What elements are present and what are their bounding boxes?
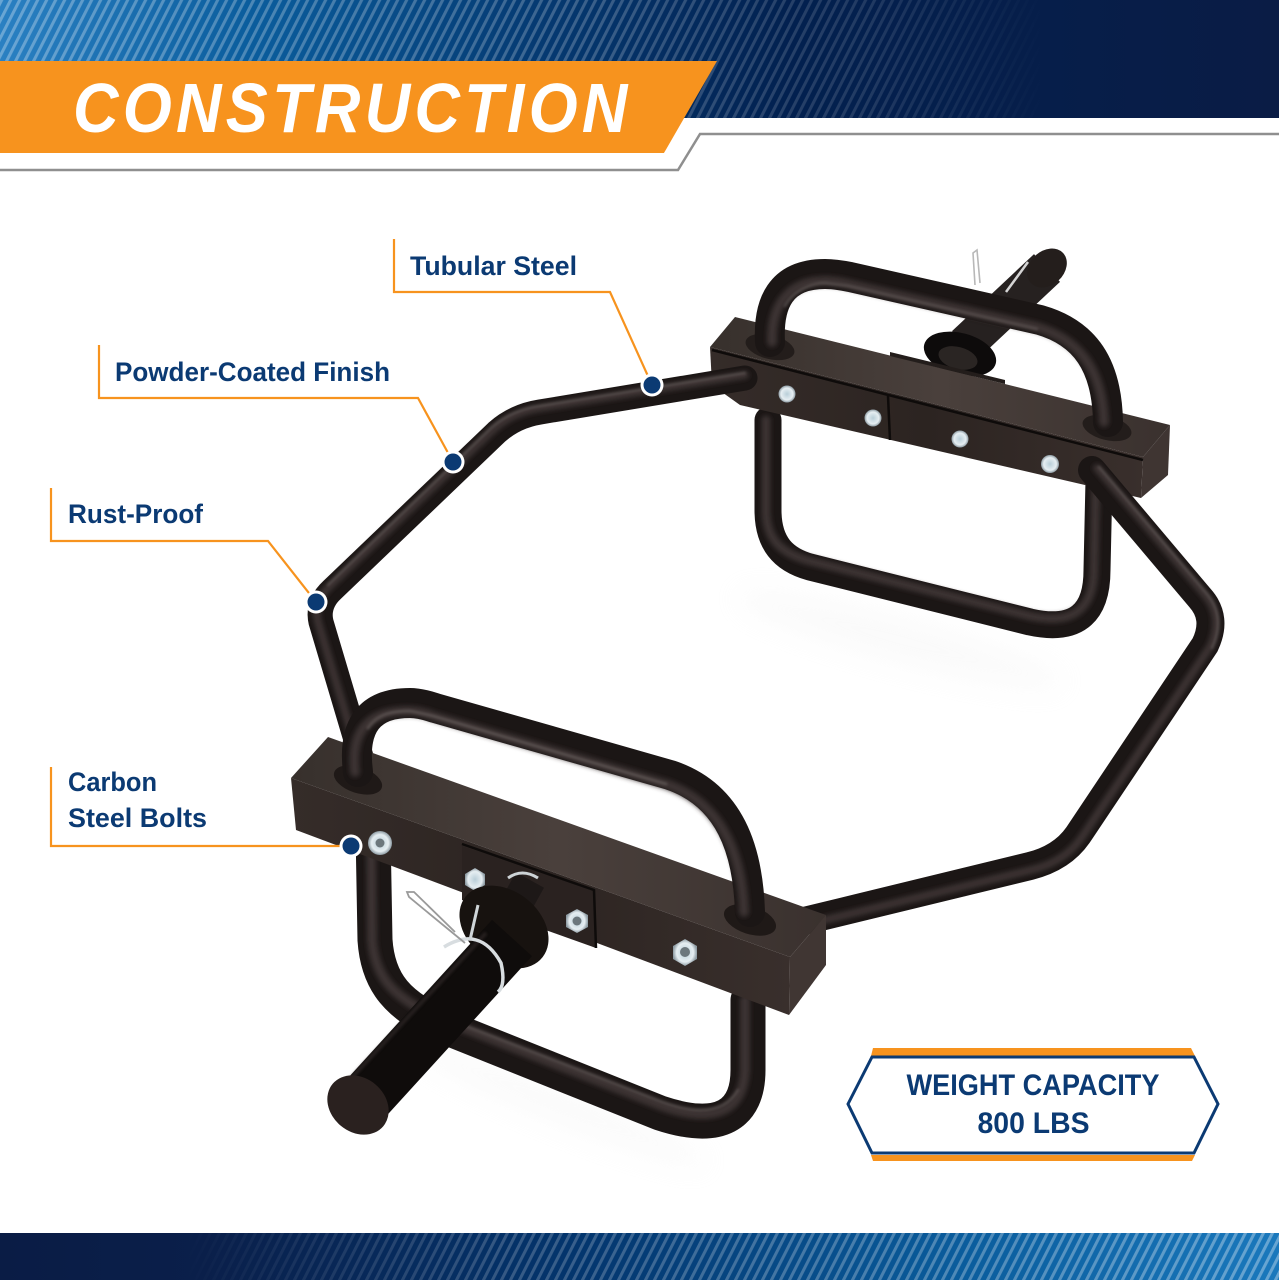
title ribbon (0, 61, 717, 153)
callout: Carbon Steel Bolts (51, 767, 362, 858)
weight capacity badge: WEIGHT CAPACITY (906, 1069, 1160, 1102)
front loading sleeve (315, 868, 565, 1147)
callout: Powder-Coated Finish (99, 345, 464, 474)
back sleeve bar (710, 317, 1170, 498)
callout: Carbon Steel Bolts: Carbon (68, 767, 157, 797)
left frame tube (317, 373, 745, 760)
back loading sleeve (919, 241, 1075, 384)
product: hex trap bar (291, 241, 1218, 1147)
callout: Rust-Proof: Rust-Proof (68, 499, 204, 529)
footer band (0, 1233, 1279, 1280)
weight capacity badge (848, 1048, 1218, 1161)
front lower handle (371, 830, 748, 1121)
header band (0, 0, 1279, 118)
callout: Tubular Steel: Tubular Steel (410, 251, 577, 281)
back top handle (743, 274, 1134, 446)
callout: Tubular Steel (394, 239, 664, 396)
front sleeve bar (291, 737, 826, 1015)
callout: Powder-Coated Finish: Powder-Coated Finish (115, 357, 390, 387)
callout: Carbon Steel Bolts: Steel Bolts (68, 803, 207, 833)
floor shadows (405, 575, 1070, 1182)
right frame tube (800, 467, 1218, 926)
back lower handle (766, 420, 1099, 625)
callout: Rust-Proof (51, 488, 328, 614)
weight capacity badge: 800 LBS (978, 1107, 1090, 1140)
ribbon white cut and outline (0, 118, 1279, 170)
title ribbon: CONSTRUCTION (73, 70, 629, 148)
front top handle (330, 703, 780, 942)
